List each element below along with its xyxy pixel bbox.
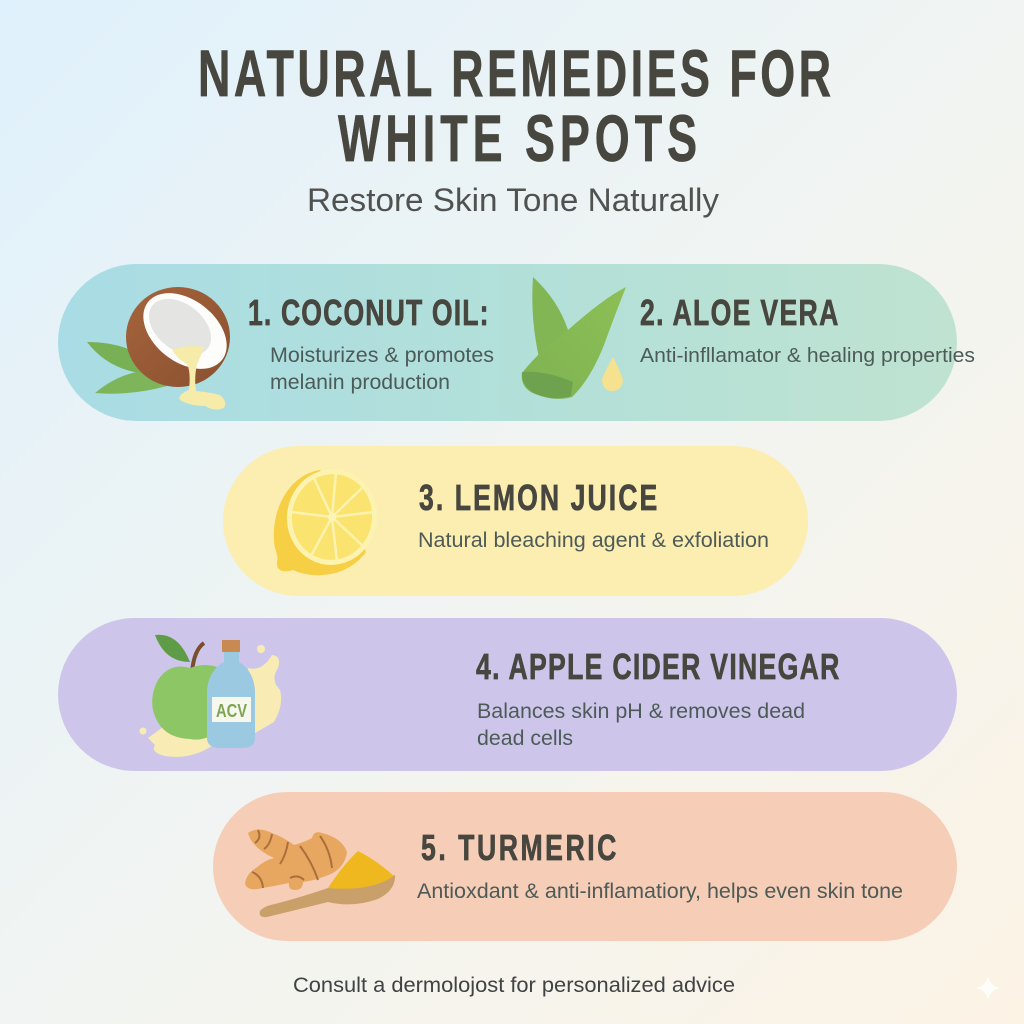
heading: apple cider vinegar: 4. APPLE CIDER VINEGAR	[476, 646, 839, 687]
footer note: Consult a dermolojost for personalized advice	[293, 974, 735, 997]
icon: aloe vera	[522, 277, 626, 399]
heading: turmeric: 5. TURMERIC	[421, 827, 616, 868]
icon: turmeric root and spoon	[245, 830, 395, 917]
heading: aloe vera: 2. ALOE VERA	[640, 292, 838, 333]
description: apple cider vinegar: dead cells	[477, 727, 573, 750]
panel: turmeric	[213, 792, 957, 941]
description: coconut oil	[270, 344, 494, 394]
pill background	[58, 618, 957, 771]
description: apple cider vinegar: Balances skin pH & removes dead	[477, 700, 805, 723]
pill background	[213, 792, 957, 941]
icon: coconut	[87, 278, 241, 410]
panel: coconut oil and aloe vera	[58, 264, 975, 421]
description: turmeric: Antioxdant & anti-inflamatiory, helps even skin tone	[417, 880, 903, 903]
panel: apple cider vinegar	[58, 618, 957, 771]
description: coconut oil: melanin production	[270, 371, 450, 394]
panel: lemon juice	[223, 446, 808, 596]
icon: apple and vinegar bottle	[140, 635, 281, 757]
icon: apple and vinegar bottle: ACV	[216, 701, 247, 721]
title	[198, 36, 831, 175]
description: coconut oil: Moisturizes & promotes	[270, 344, 494, 367]
description: lemon juice: Natural bleaching agent & exfoliation	[418, 529, 769, 552]
description: aloe vera: Anti-infllamator & healing properties	[640, 345, 975, 367]
subtitle: Restore Skin Tone Naturally	[307, 182, 719, 218]
description: apple cider vinegar	[477, 700, 805, 750]
title: NATURAL REMEDIES FOR	[198, 36, 831, 110]
title: WHITE SPOTS	[338, 101, 697, 175]
heading: lemon juice: 3. LEMON JUICE	[419, 477, 657, 518]
pill background	[223, 446, 808, 596]
pill background	[58, 264, 957, 421]
icon: sparkle	[976, 976, 1000, 1000]
heading: coconut oil: 1. COCONUT OIL:	[248, 292, 489, 333]
icon: lemon	[274, 462, 385, 575]
